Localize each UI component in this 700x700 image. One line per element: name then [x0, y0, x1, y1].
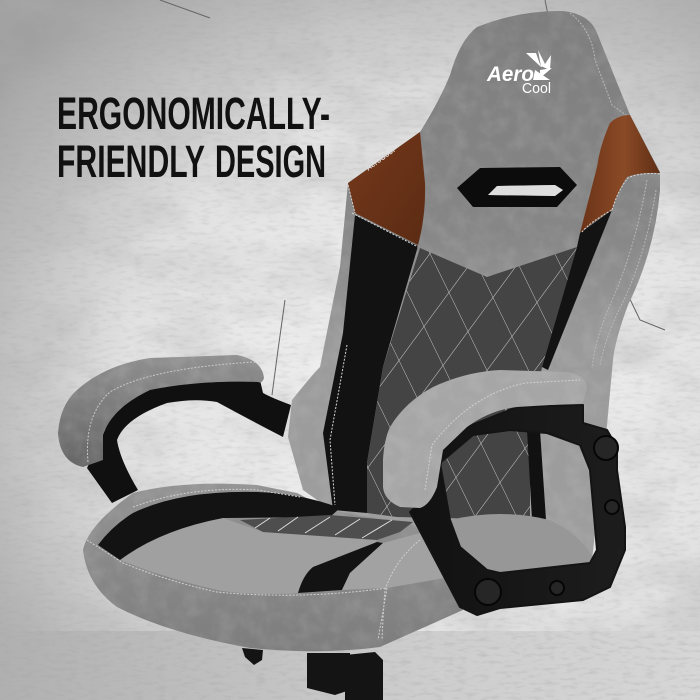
- black strip behind front armrest: [527, 430, 546, 520]
- diamond stitched centre panel: [367, 247, 577, 520]
- wing label: AeroCool: [364, 145, 396, 173]
- title: [57, 88, 330, 187]
- slot opening: [488, 185, 563, 196]
- seat right bolster: [342, 533, 445, 590]
- title: FRIENDLY: [57, 136, 205, 187]
- back armrest pad: [58, 355, 264, 467]
- backrest: [288, 11, 660, 560]
- floor: [0, 631, 700, 700]
- seat centre mesh panel: [240, 515, 413, 540]
- AeroCool logo: Cool: [522, 80, 551, 97]
- AeroCool logo: Aero: [486, 63, 534, 86]
- front armrest pad: [383, 370, 587, 508]
- title: ERGONOMICALLY-: [57, 88, 330, 139]
- headrest stitching: [570, 13, 656, 368]
- right brown wing: [580, 115, 660, 233]
- back armrest frame: [87, 380, 291, 503]
- title: DESIGN: [215, 136, 326, 187]
- seat stitching: [87, 489, 420, 640]
- seat visible through front armrest: [450, 514, 592, 575]
- left black side panel: [323, 215, 418, 513]
- seat left black band: [98, 492, 340, 560]
- left brown wing: [348, 132, 425, 245]
- seat top surface: [120, 518, 377, 594]
- seat right black panel: [298, 542, 383, 593]
- front armrest frame: [410, 405, 625, 615]
- AeroCool logo: [486, 50, 552, 97]
- right black strip: [542, 210, 612, 370]
- chair base: [242, 648, 383, 700]
- stitching on panel edges: [330, 174, 660, 505]
- seat cushion: [83, 484, 463, 651]
- frame bolts: [475, 436, 619, 605]
- lumbar slot: [457, 167, 577, 207]
